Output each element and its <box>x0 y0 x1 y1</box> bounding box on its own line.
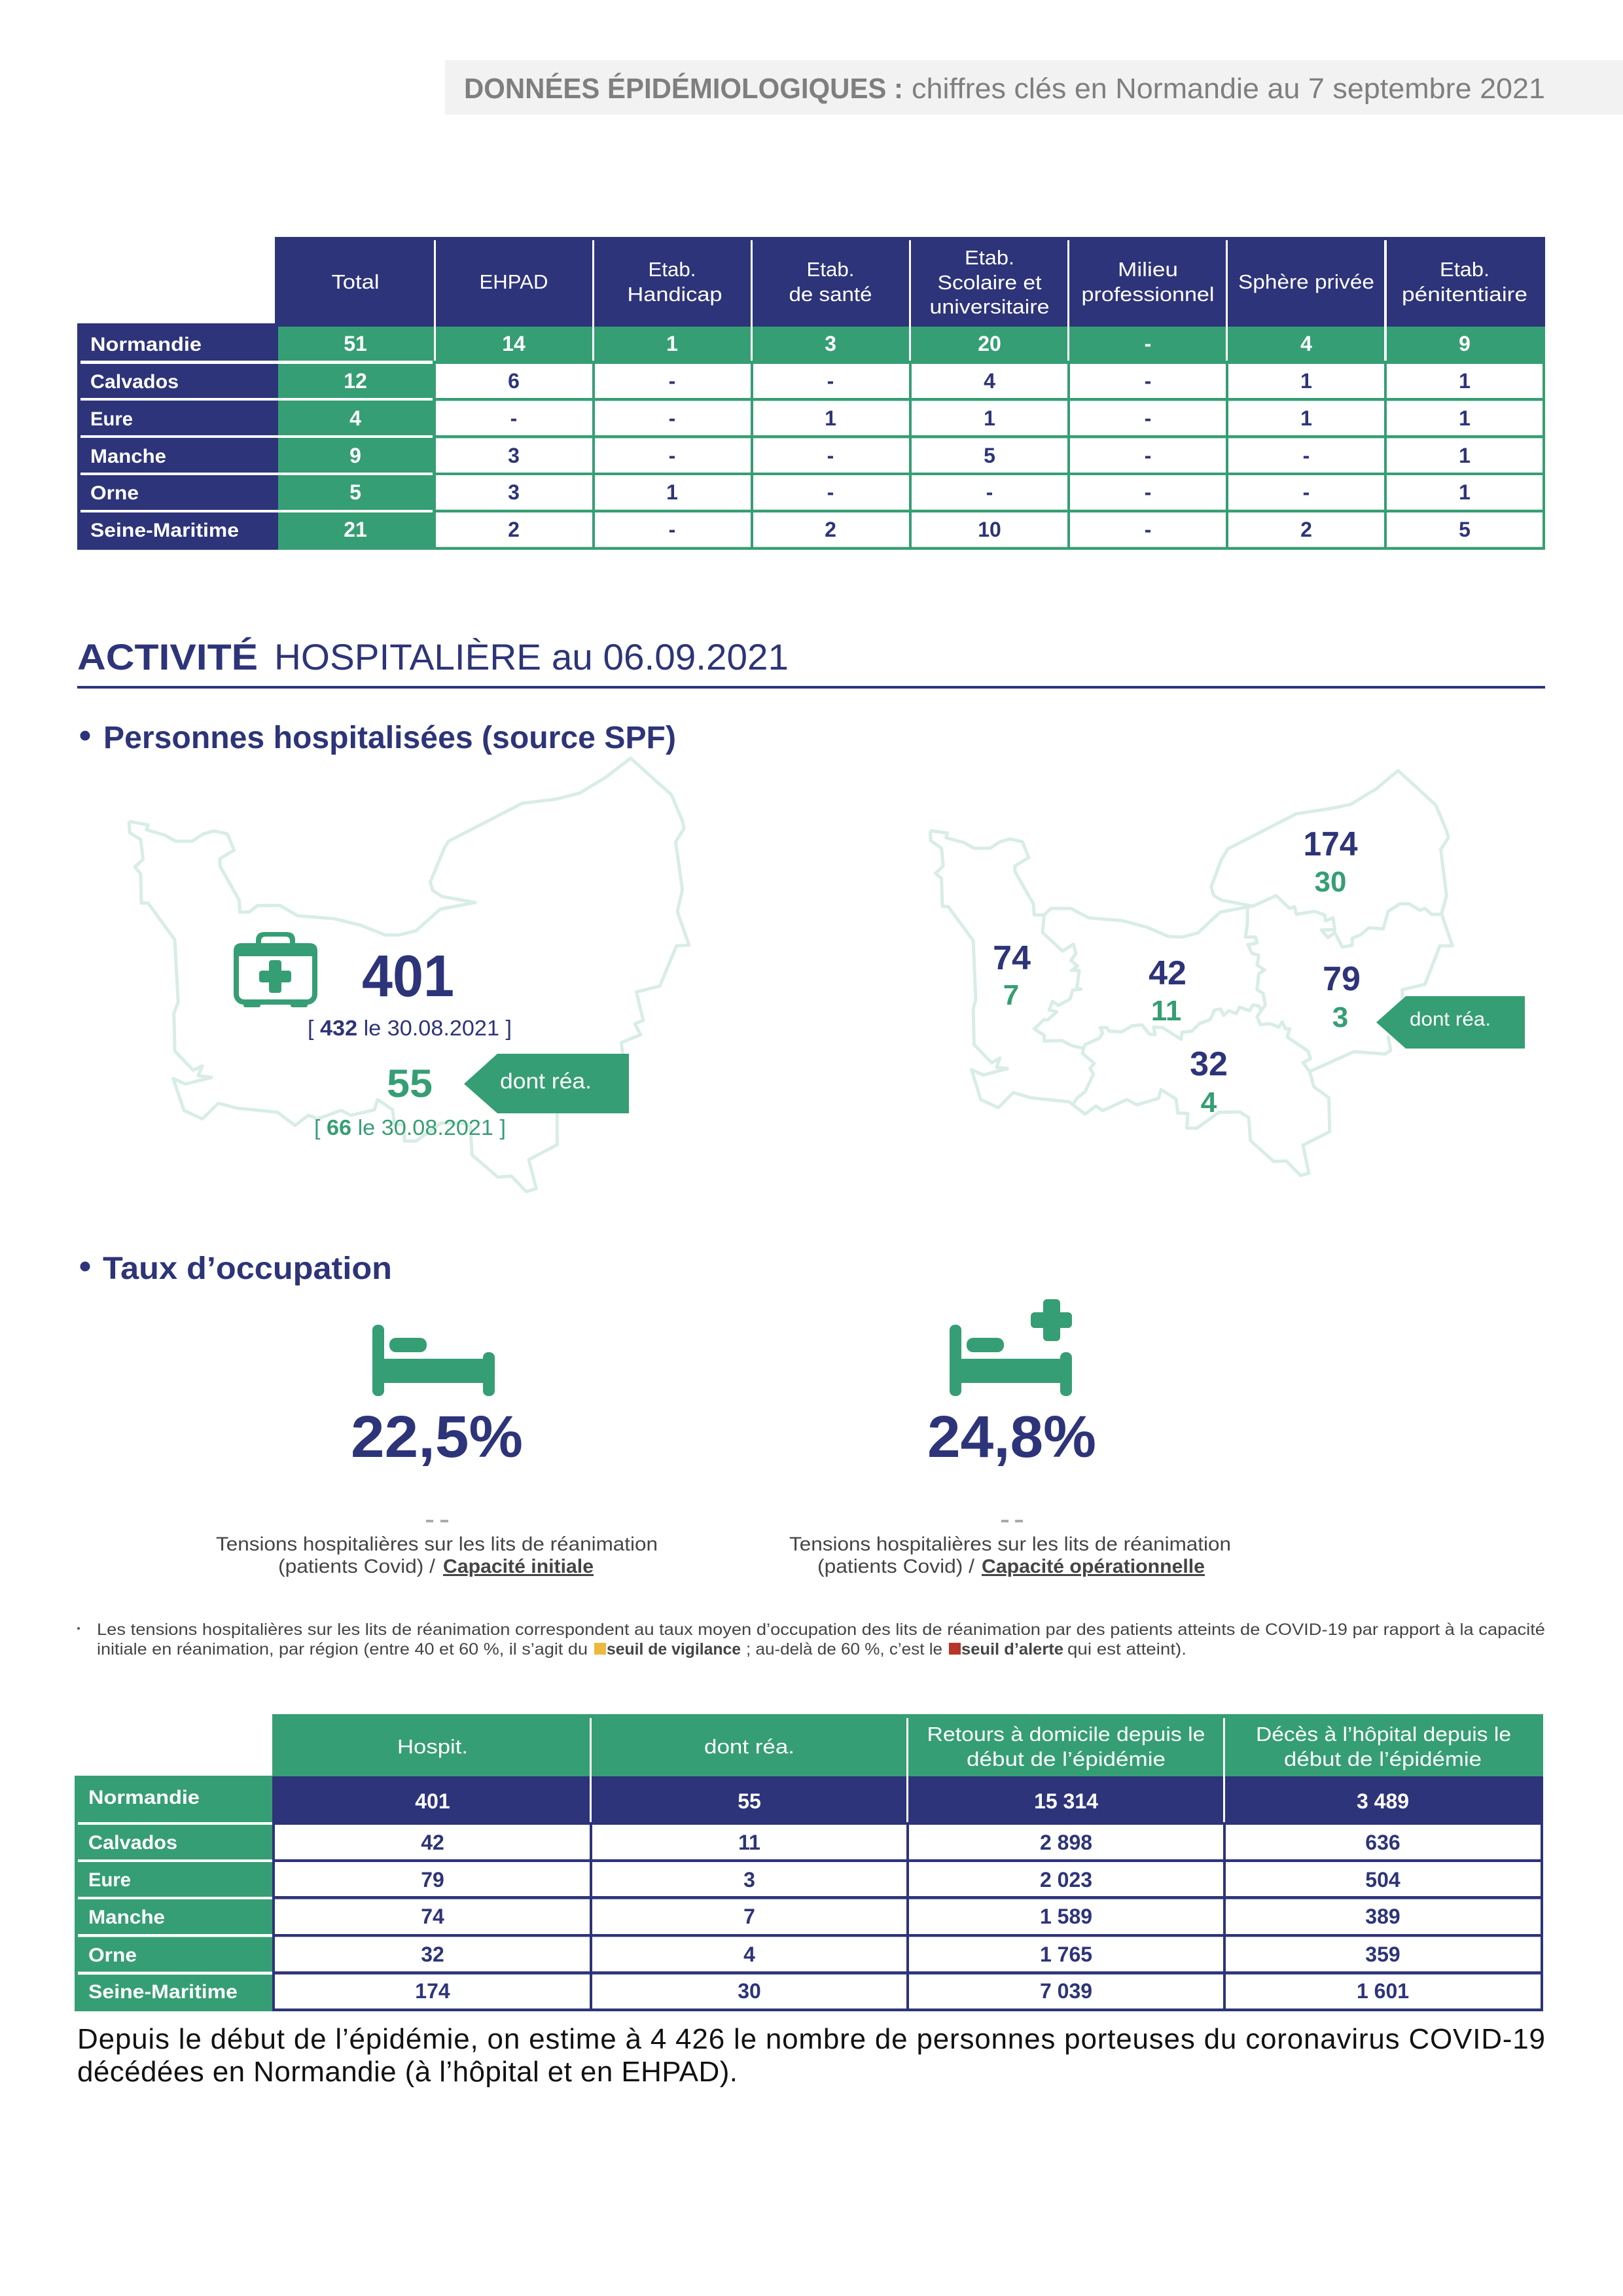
table 1 header row: Etab. <box>1440 258 1489 281</box>
section heading: activité hospitalière: HOSPITALIÈRE au 06.09.2021 <box>274 636 789 677</box>
ICU total: 55: 55 <box>387 1062 433 1105</box>
table 1 row: Orne: - <box>827 480 834 504</box>
table 1 header row: Sphère privée <box>1238 270 1374 293</box>
table 1 row: Eure <box>349 406 1471 430</box>
caption: operational capacity <box>789 1534 1231 1577</box>
table 1 row: Normandie <box>344 332 1471 355</box>
table 2 row: Manche <box>421 1905 1400 1928</box>
table 1 row: Manche: - <box>1303 444 1310 467</box>
table 1 row: Manche <box>349 444 1471 467</box>
table 1 header row: Etab. <box>806 258 855 281</box>
caption: initial capacity: Tensions hospitalières sur les lits de réanimation <box>216 1534 658 1555</box>
footnote: seuil d’alerte <box>961 1640 1063 1659</box>
table 2 row labels: Seine-Maritime <box>88 1981 238 2003</box>
footnote: initiale en réanimation, par région (entre 40 et 60 %, il s’agit du <box>97 1640 588 1659</box>
caption: initial capacity: Capacité initiale <box>443 1556 594 1577</box>
table 2 header row: début de l’épidémie <box>1284 1748 1482 1770</box>
closing statement: décédées en Normandie (à l’hôpital et en EHPAD). <box>77 2056 738 2088</box>
caption: operational capacity: (patients Covid) / <box>817 1556 975 1577</box>
table 2 row: Seine-Maritime <box>415 1979 1409 2003</box>
dash separator <box>1001 1520 1023 1522</box>
table 1 header row: pénitentiaire <box>1402 283 1527 306</box>
table 1 row: Seine-Maritime: - <box>1145 518 1151 541</box>
table 1 row: Seine-Maritime: 21 <box>344 518 367 541</box>
map values: Manche <box>993 939 1031 1011</box>
table 2 row: Orne: 1 765 <box>1040 1943 1092 1966</box>
map values: Orne: 32 <box>1190 1045 1228 1083</box>
table 1 row: Manche: 1 <box>1459 444 1471 467</box>
table 1 header row: universitaire <box>929 295 1050 318</box>
table 1 row: Calvados: - <box>1145 369 1151 393</box>
table 2 row: Normandie: 3 489 <box>1357 1789 1409 1813</box>
table 2 row labels: Normandie <box>88 1787 200 1808</box>
table 1 header row: Milieu <box>1118 258 1178 281</box>
map values: Manche: 7 <box>1003 979 1019 1011</box>
table 2 row labels: Manche <box>88 1907 165 1928</box>
arrow label: dont réa map 2 <box>1376 996 1525 1049</box>
table 1 row labels: Seine-Maritime <box>90 520 239 541</box>
table 1 row: Normandie: 1 <box>666 332 678 355</box>
table 2 row: Calvados: 42 <box>421 1831 444 1854</box>
map values: Eure: 79 <box>1323 960 1361 998</box>
table 1 row: Normandie: 20 <box>978 332 1001 355</box>
table 1 row: Orne: 5 <box>349 480 361 504</box>
table 1 row: Normandie: 4 <box>1300 332 1312 355</box>
arrow label: dont réa: dont réa. <box>500 1069 592 1093</box>
table 1 row labels: Manche <box>90 446 166 467</box>
map values: Manche: 74 <box>993 939 1031 977</box>
section heading: activité hospitalière: ACTIVITÉ <box>77 636 258 677</box>
table 2 row: Eure: 3 <box>743 1868 755 1892</box>
table 2 header row: Retours à domicile depuis le <box>927 1723 1205 1746</box>
table 2 header row <box>272 1714 1543 1823</box>
table 1 row: Seine-Maritime: 5 <box>1459 518 1471 541</box>
table 2 body grid <box>272 1776 1543 2011</box>
table 2 row: Orne <box>421 1943 1400 1966</box>
closing statement <box>77 2023 1545 2088</box>
dash separator <box>426 1520 448 1522</box>
table 1 row: Seine-Maritime: 2 <box>825 518 836 541</box>
table 2 row: Eure: 504 <box>1365 1868 1400 1892</box>
subheading: personnes hospitalisées: Personnes hospitalisées (source SPF) <box>103 721 676 755</box>
table 1 row: Eure: 4 <box>349 406 361 430</box>
closing statement: Depuis le début de l’épidémie, on estime à 4 426 le nombre de personnes porteuses du coronavirus COVID-19 <box>77 2023 1545 2055</box>
caption: initial capacity: (patients Covid) / <box>278 1556 436 1577</box>
table 1 row: Calvados: 1 <box>1300 369 1312 393</box>
map values: Orne <box>1190 1045 1228 1119</box>
arrow label: dont réa map 2: dont réa. <box>1410 1009 1491 1030</box>
table 2 row: Calvados: 11 <box>738 1831 760 1854</box>
table 1 header row: Scolaire et <box>937 271 1042 294</box>
table 1 header row: professionnel <box>1081 283 1215 306</box>
table 1 row: Manche: - <box>827 444 834 467</box>
table 1 row: Manche: - <box>669 444 675 467</box>
table 1 row labels <box>77 323 278 550</box>
table 2 row labels: Eure <box>88 1869 131 1891</box>
map values: Calvados: 42 <box>1149 954 1186 992</box>
table 1 row: Eure: 1 <box>1459 406 1471 430</box>
table 1 row: Calvados: 4 <box>984 369 995 393</box>
table 1 row: Eure: - <box>510 406 517 430</box>
table 2 row: Eure: 79 <box>421 1868 444 1892</box>
table 1 row: Normandie: 3 <box>825 332 836 355</box>
map values: Calvados: 11 <box>1151 995 1181 1027</box>
map values: Seine-Maritime <box>1304 825 1358 898</box>
table 1 row: Normandie: 14 <box>502 332 526 355</box>
table: clusters by setting <box>77 237 1545 550</box>
table 1 row: Normandie: 9 <box>1459 332 1471 355</box>
map values: Orne: 4 <box>1201 1086 1217 1119</box>
table 1 row: Orne: 1 <box>666 480 678 504</box>
table 2 header row: Hospit. <box>397 1735 468 1758</box>
table 1 row: Orne: - <box>1303 480 1310 504</box>
table 1 body grid <box>80 240 1545 550</box>
table 2 row: Normandie: 15 314 <box>1034 1789 1098 1813</box>
table 1 row labels: Normandie <box>90 334 202 355</box>
table 1 row: Eure: 1 <box>1300 406 1312 430</box>
table 1 row: Eure: - <box>669 406 675 430</box>
footnote: ; au-delà de 60 %, c’est le <box>746 1640 942 1659</box>
table 2 row: Manche: 389 <box>1365 1905 1400 1928</box>
caption: initial capacity <box>216 1534 658 1577</box>
footnote <box>77 1621 1545 1659</box>
icon: first aid kit <box>234 932 317 1007</box>
table 2 row: Normandie <box>415 1789 1409 1813</box>
table 1 row: Eure: - <box>1145 406 1151 430</box>
table 2 header row: début de l’épidémie <box>967 1748 1166 1770</box>
table 1 row: Orne: - <box>986 480 993 504</box>
header banner: DONNÉES ÉPIDÉMIOLOGIQUES : <box>464 72 903 105</box>
table 2 row: Eure: 2 023 <box>1040 1868 1092 1892</box>
table 1 row: Manche: 5 <box>984 444 995 467</box>
footnote: qui est atteint). <box>1067 1640 1186 1659</box>
table: hospital activity <box>75 1714 1543 2011</box>
occupation rate: operational capacity: 24,8% <box>927 1405 1096 1470</box>
table 1 header row <box>275 237 1545 327</box>
occupation rate: initial capacity: 22,5% <box>351 1405 523 1470</box>
table 1 row: Calvados: 6 <box>508 369 520 393</box>
icon: bed with cross <box>950 1299 1072 1396</box>
table 1 row: Eure: 1 <box>825 406 836 430</box>
map values: Eure: 3 <box>1332 1001 1348 1033</box>
map values: Seine-Maritime: 174 <box>1304 825 1358 863</box>
table 1 header row: Etab. <box>965 246 1014 269</box>
table 1 row: Seine-Maritime <box>344 518 1471 541</box>
total hospitalised: 401: 401 <box>362 944 454 1009</box>
table 2 row: Calvados: 636 <box>1365 1831 1400 1854</box>
table 1 row: Orne <box>349 480 1471 504</box>
table 2 row: Normandie: 55 <box>738 1789 761 1813</box>
header banner: chiffres clés en Normandie au 7 septembre 2021 <box>912 73 1545 105</box>
table 2 row: Seine-Maritime: 7 039 <box>1040 1979 1092 2003</box>
table 2 row: Manche: 7 <box>743 1905 755 1928</box>
table 1 row: Eure: 1 <box>984 406 995 430</box>
table 1 row: Calvados: 1 <box>1459 369 1471 393</box>
map: Normandie outline <box>129 758 689 1192</box>
table 1 row: Manche: - <box>1145 444 1151 467</box>
table 1 header row: Etab. <box>648 258 696 281</box>
table 1 row: Calvados: - <box>827 369 834 393</box>
table 1 row: Seine-Maritime: - <box>669 518 675 541</box>
table 1 row: Orne: 1 <box>1459 480 1471 504</box>
table 1 row: Orne: 3 <box>508 480 520 504</box>
table 2 row: Manche: 74 <box>421 1905 444 1928</box>
map values: Calvados <box>1149 954 1186 1027</box>
table 2 row: Manche: 1 589 <box>1040 1905 1092 1928</box>
icon: bed <box>372 1325 495 1396</box>
table 1 row: Seine-Maritime: 2 <box>1300 518 1312 541</box>
table 2 row: Calvados <box>421 1831 1400 1854</box>
section heading: activité hospitalière <box>77 636 1545 689</box>
map values: Eure <box>1323 960 1361 1033</box>
header banner <box>445 60 1623 115</box>
table 1 row labels: Calvados <box>90 371 179 393</box>
table 1 row labels: Eure <box>90 408 133 430</box>
table 1 row: Normandie: 51 <box>344 332 367 355</box>
table 1 header row: EHPAD <box>479 270 548 293</box>
table 2 row: Seine-Maritime: 30 <box>738 1979 761 2003</box>
table 1 row: Normandie: - <box>1145 332 1151 355</box>
table 2 row: Seine-Maritime: 174 <box>415 1979 450 2003</box>
table 2 row: Normandie: 401 <box>415 1789 450 1813</box>
table 1 row: Calvados: - <box>669 369 675 393</box>
table 2 row labels <box>75 1776 273 2011</box>
table 2 row: Orne: 32 <box>421 1943 444 1966</box>
footnote: Les tensions hospitalières sur les lits de réanimation correspondent au taux moyen d’occupation des lits de réanimation par des patients atteints de COVID-19 par rapport à la capacité <box>97 1621 1545 1639</box>
arrow label: dont réa <box>464 1054 629 1113</box>
table 2 row labels: Orne <box>88 1945 137 1966</box>
table 2 row: Orne: 4 <box>743 1943 755 1966</box>
previous ICU value: [ 66 le 30.08.2021 ] <box>314 1115 506 1139</box>
subheading: taux d'occupation: Taux d’occupation <box>103 1251 392 1286</box>
table 1 header row: Total <box>331 270 380 293</box>
table 1 row: Calvados: 12 <box>344 369 367 393</box>
table 2 row labels: Calvados <box>88 1832 177 1854</box>
table 2 row: Orne: 359 <box>1365 1943 1400 1966</box>
map: departments <box>930 770 1452 1175</box>
table 1 row: Manche: 3 <box>508 444 520 467</box>
table 1 row: Orne: - <box>1145 480 1151 504</box>
table 1 row: Seine-Maritime: 10 <box>978 518 1001 541</box>
table 1 header row: de santé <box>789 283 872 306</box>
previous hospitalised value: [ 432 le 30.08.2021 ] <box>308 1016 512 1040</box>
table 1 header row: Handicap <box>627 283 722 306</box>
table 1 row: Calvados <box>344 369 1471 393</box>
table 2 header row: dont réa. <box>704 1735 794 1758</box>
table 1 row: Manche: 9 <box>349 444 361 467</box>
caption: operational capacity: Tensions hospitalières sur les lits de réanimation <box>789 1534 1231 1555</box>
table 1 row labels: Orne <box>90 482 139 504</box>
footnote: seuil de vigilance <box>607 1640 741 1659</box>
table 1 row: Seine-Maritime: 2 <box>508 518 520 541</box>
caption: operational capacity: Capacité opérationnelle <box>982 1556 1205 1577</box>
table 2 row: Calvados: 2 898 <box>1040 1831 1092 1854</box>
table 2 header row: Décès à l’hôpital depuis le <box>1256 1723 1511 1746</box>
map values: Seine-Maritime: 30 <box>1315 866 1346 898</box>
table 2 row: Seine-Maritime: 1 601 <box>1357 1979 1409 2003</box>
table 2 row: Eure <box>421 1868 1400 1892</box>
